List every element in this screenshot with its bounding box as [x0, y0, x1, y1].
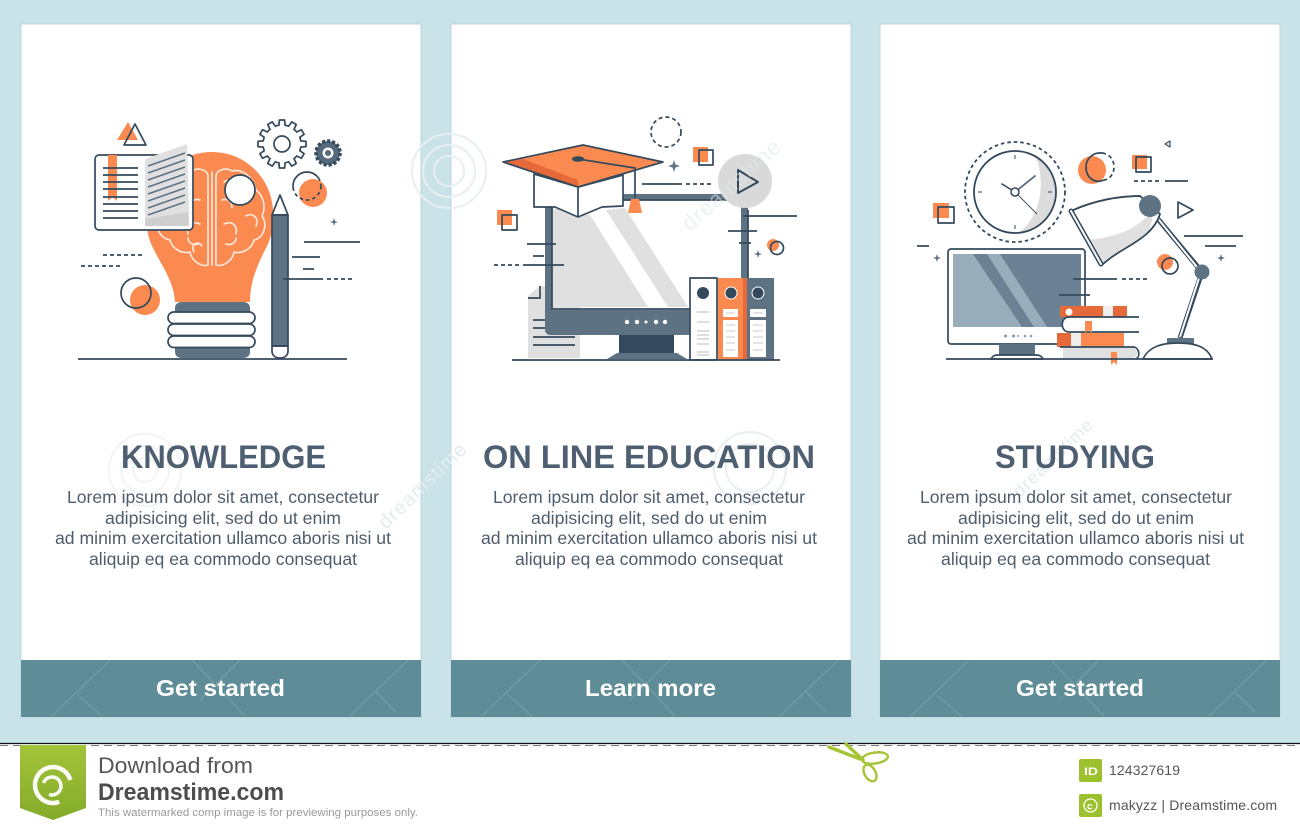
squares top — [1132, 155, 1151, 172]
decorative circle right — [293, 172, 327, 207]
monitor bezel — [545, 310, 692, 335]
body text: knowledge: aliquip eq ea commodo consequat — [89, 549, 357, 569]
heading: on line education: ON LINE EDUCATION — [483, 439, 815, 475]
dashed circle — [651, 117, 681, 147]
body text: on line education: adipisicing elit, sed do ut enim — [531, 508, 767, 528]
gear large — [258, 120, 306, 168]
squares left — [497, 210, 517, 230]
icon: desk with clock and lamp — [917, 141, 1243, 365]
open book — [95, 144, 193, 230]
body text: studying: adipisicing elit, sed do ut enim — [958, 508, 1194, 528]
speed lines — [81, 242, 360, 279]
button: learn more — [451, 660, 851, 717]
speed lines — [917, 181, 1243, 279]
body text: on line education: aliquip eq ea commodo consequat — [515, 549, 783, 569]
triangle — [1178, 202, 1193, 218]
panel: on line education — [374, 24, 851, 717]
icon: scissors — [829, 744, 889, 784]
text: author credit: makyzz | Dreamstime.com — [1109, 797, 1277, 813]
icon: graduation and computer — [494, 117, 797, 360]
body text: studying: ad minim exercitation ullamco aboris nisi ut — [907, 528, 1244, 548]
binders — [690, 278, 774, 360]
watermark — [412, 134, 786, 504]
small circles — [767, 239, 784, 254]
triangles — [117, 122, 146, 145]
badge: dreamstime logo — [20, 745, 86, 820]
squares left — [933, 203, 954, 223]
body text: knowledge: adipisicing elit, sed do ut enim — [105, 508, 341, 528]
ground line — [946, 358, 1213, 360]
circle on brain — [225, 175, 255, 205]
watermark text: dreamstime — [374, 438, 472, 534]
body text: knowledge: Lorem ipsum dolor sit amet, consectetur — [67, 487, 379, 507]
body text: knowledge — [55, 487, 391, 569]
monitor screen — [545, 194, 748, 310]
panel: knowledge — [21, 24, 421, 717]
speed lines — [494, 184, 797, 265]
sparkles — [933, 254, 1225, 262]
icon: copyright badge: c — [1087, 802, 1093, 812]
icon: light bulb with brain — [78, 120, 360, 359]
body text: on line education: ad minim exercitation ullamco aboris nisi ut — [481, 528, 817, 548]
footer: watermark strip — [0, 743, 1300, 833]
decorative circle left — [121, 278, 160, 315]
monitor — [948, 249, 1117, 359]
watermark text: dreamstime — [1009, 414, 1098, 501]
wall clock — [965, 142, 1065, 242]
icon: copyright badge — [1079, 794, 1102, 817]
icon: id badge — [1079, 759, 1102, 782]
body text: on line education: Lorem ipsum dolor sit amet, consectetur — [493, 487, 805, 507]
button: get started — [21, 660, 421, 717]
decorative open circle — [1078, 153, 1114, 184]
watermark text over monitor: dreamstime — [677, 134, 786, 236]
body text: knowledge: ad minim exercitation ullamco aboris nisi ut — [55, 528, 391, 548]
button: get started: Get started — [1016, 675, 1144, 701]
button: get started — [880, 660, 1280, 717]
desk lamp — [1071, 195, 1212, 359]
body text: studying — [907, 487, 1244, 569]
bulb — [146, 152, 273, 302]
ground line — [512, 359, 780, 361]
text: dreamstime.com: Dreamstime.com — [98, 779, 284, 806]
stack of books — [1057, 306, 1139, 365]
graduation cap — [503, 145, 663, 217]
body text: studying: Lorem ipsum dolor sit amet, consectetur — [920, 487, 1232, 507]
icon: id badge: ID — [1084, 766, 1098, 778]
body text: on line education — [481, 487, 817, 569]
heading: studying: STUDYING — [995, 439, 1155, 475]
brain — [158, 169, 265, 265]
bulb socket — [168, 302, 255, 358]
body text: studying: aliquip eq ea commodo consequat — [941, 549, 1210, 569]
sparkles — [668, 160, 762, 258]
monitor stand — [607, 335, 687, 359]
button: get started: Get started — [156, 675, 285, 701]
heading: knowledge: KNOWLEDGE — [121, 439, 326, 475]
text: download from: Download from — [98, 753, 253, 778]
squares top — [693, 147, 713, 165]
ground line — [78, 358, 347, 360]
pencil — [272, 195, 288, 358]
small triangle — [1165, 141, 1170, 147]
document — [528, 286, 580, 358]
watermark — [109, 434, 181, 506]
button: learn more: Learn more — [585, 675, 716, 701]
play button — [718, 154, 772, 208]
gear small — [316, 141, 340, 165]
text: preview note: This watermarked comp image is for previewing purposes only. — [98, 807, 418, 819]
sparkle — [330, 218, 338, 226]
text: image id: 124327619 — [1109, 762, 1180, 778]
panel: studying — [880, 24, 1280, 717]
